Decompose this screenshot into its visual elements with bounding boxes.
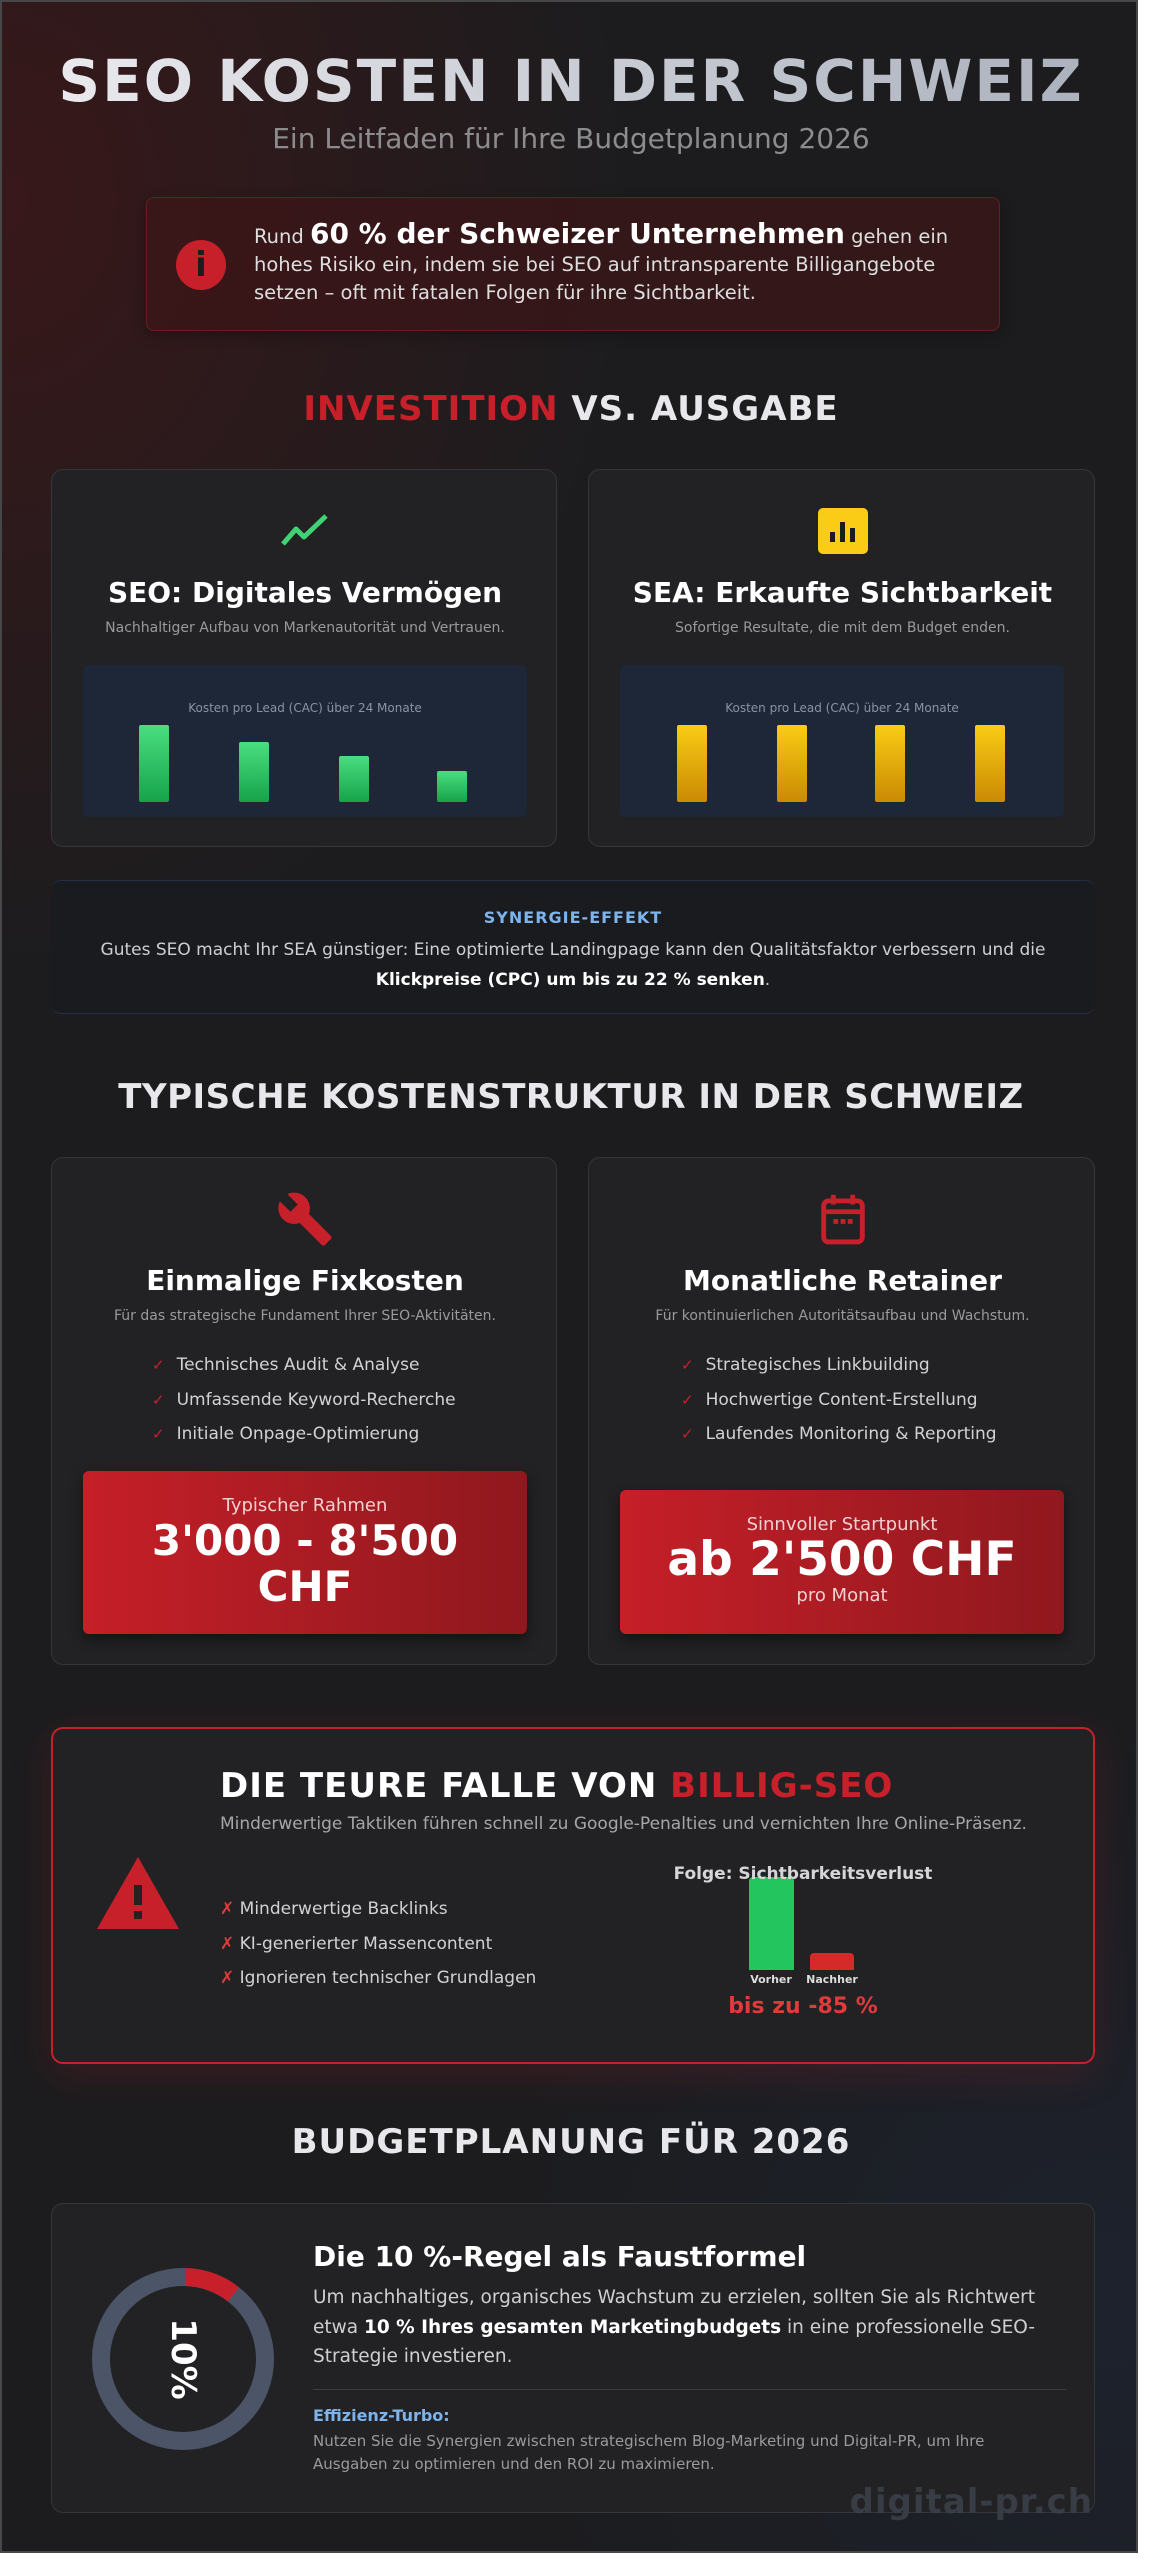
synergie text: Gutes SEO macht Ihr SEA günstiger: Eine optimierte Landingpage kann den Qualitätsfaktor verbessern und die Klickpreise (CPC) um bis zu 22 % senken. bbox=[101, 940, 1045, 990]
icon: info: i bbox=[195, 245, 207, 285]
chart: sichtbarkeitsverlust: bis zu -85 % bbox=[728, 1994, 878, 2019]
SEA subtitle: Sofortige Resultate, die mit dem Budget enden. bbox=[675, 620, 1010, 636]
icon: wrench bbox=[278, 1192, 332, 1246]
panel: synergie bbox=[51, 880, 1095, 1014]
list: retainer items bbox=[681, 1355, 997, 1444]
list: bad tactics: ✗ KI-generierter Massencontent bbox=[220, 1934, 492, 1954]
icon: info bbox=[176, 240, 226, 290]
chart: 10 percent donut bbox=[92, 2268, 274, 2450]
callout: 60 percent bbox=[146, 197, 1000, 331]
price: retainer: Sinnvoller Startpunkt bbox=[747, 1514, 937, 1535]
chart: sichtbarkeitsverlust: Vorher bbox=[750, 1973, 792, 1986]
synergie title: SYNERGIE-EFFEKT bbox=[484, 908, 662, 927]
panel: budget bbox=[51, 2203, 1095, 2513]
list: fixkosten items: ✓ Umfassende Keyword-Recherche bbox=[152, 1390, 456, 1410]
SEO title: SEO: Digitales Vermögen bbox=[108, 576, 502, 609]
price: retainer: pro Monat bbox=[796, 1585, 888, 1606]
list: fixkosten items bbox=[152, 1355, 456, 1444]
retainer subtitle: Für kontinuierlichen Autoritätsaufbau und Wachstum. bbox=[655, 1308, 1030, 1324]
SEO subtitle: Nachhaltiger Aufbau von Markenautorität und Vertrauen. bbox=[105, 620, 505, 636]
fixkosten subtitle: Für das strategische Fundament Ihrer SEO-Aktivitäten. bbox=[114, 1308, 496, 1324]
fixkosten title: Einmalige Fixkosten bbox=[146, 1264, 464, 1297]
icon: trend bbox=[281, 514, 328, 546]
list: retainer items: ✓ Hochwertige Content-Erstellung bbox=[681, 1390, 978, 1410]
price: fixkosten: 3'000 - 8'500 bbox=[152, 1516, 458, 1565]
price: fixkosten bbox=[83, 1471, 527, 1634]
heading: investition vs ausgabe: INVESTITION VS. AUSGABE bbox=[303, 389, 839, 429]
list: retainer items: ✓ Strategisches Linkbuilding bbox=[681, 1355, 930, 1375]
billig title: DIE TEURE FALLE VON BILLIG-SEO bbox=[220, 1766, 893, 1806]
panel: retainer bbox=[588, 1157, 1095, 1665]
chart: SEA CAC bbox=[620, 665, 1064, 817]
watermark: digital-pr.ch bbox=[850, 2482, 1093, 2522]
price: retainer: ab 2'500 CHF bbox=[667, 1532, 1017, 1587]
callout text: Rund 60 % der Schweizer Unternehmen gehen ein hohes Risiko ein, indem sie bei SEO auf intransparente Billigangebote setzen – oft mit fatalen Folgen für ihre Sichtbarkeit. bbox=[254, 217, 948, 304]
budget title: Die 10 %-Regel als Faustformel bbox=[313, 2240, 806, 2273]
chart: sichtbarkeitsverlust: Folge: Sichtbarkeitsverlust bbox=[674, 1864, 932, 1884]
chart: SEA CAC: Kosten pro Lead (CAC) über 24 Monate bbox=[725, 701, 959, 715]
heading: kostenstruktur: TYPISCHE KOSTENSTRUKTUR IN DER SCHWEIZ bbox=[118, 1077, 1024, 1117]
list: bad tactics: ✗ Minderwertige Backlinks bbox=[220, 1899, 448, 1919]
list: bad tactics: ✗ Ignorieren technischer Grundlagen bbox=[220, 1968, 536, 1988]
price: fixkosten: CHF bbox=[258, 1562, 352, 1611]
retainer title: Monatliche Retainer bbox=[683, 1264, 1002, 1297]
chart: SEO CAC bbox=[83, 665, 527, 817]
icon: calendar bbox=[821, 1194, 865, 1244]
chart: sichtbarkeitsverlust bbox=[674, 1864, 932, 2019]
title: SEO KOSTEN IN DER SCHWEIZ bbox=[58, 47, 1084, 115]
list: fixkosten items: ✓ Initiale Onpage-Optimierung bbox=[152, 1424, 419, 1444]
list: retainer items: ✓ Laufendes Monitoring & Reporting bbox=[681, 1424, 997, 1444]
chart: 10 percent donut: 10% bbox=[163, 2318, 203, 2400]
panel: fixkosten bbox=[51, 1157, 557, 1665]
billig subtitle: Minderwertige Taktiken führen schnell zu Google-Penalties und vernichten Ihre Online-Präsenz. bbox=[220, 1814, 1027, 1834]
budget text: Um nachhaltiges, organisches Wachstum zu erzielen, sollten Sie als Richtwert etwa 10 % Ihres gesamten Marketingbudgets in eine professionelle SEO-Strategie investieren. bbox=[313, 2287, 1035, 2367]
subtitle: Ein Leitfaden für Ihre Budgetplanung 2026 bbox=[272, 122, 870, 155]
list: fixkosten items: ✓ Technisches Audit & Analyse bbox=[152, 1355, 419, 1375]
chart: sichtbarkeitsverlust: Nachher bbox=[806, 1973, 858, 1986]
effizienz text: Nutzen Sie die Synergien zwischen strategischem Blog-Marketing und Digital-PR, um Ihre Ausgaben zu optimieren und den ROI zu maximieren. bbox=[313, 2432, 984, 2473]
price: retainer bbox=[620, 1490, 1064, 1634]
chart: SEO CAC: Kosten pro Lead (CAC) über 24 Monate bbox=[188, 701, 422, 715]
heading: budgetplanung: BUDGETPLANUNG FÜR 2026 bbox=[292, 2122, 850, 2162]
icon: bar chart bbox=[818, 508, 868, 554]
panel: billig-seo bbox=[51, 1727, 1095, 2064]
effizienz title: Effizienz-Turbo: bbox=[313, 2406, 450, 2425]
panel: SEA bbox=[588, 469, 1095, 847]
SEA title: SEA: Erkaufte Sichtbarkeit bbox=[633, 576, 1052, 609]
list: bad tactics bbox=[220, 1899, 536, 1988]
panel: SEO bbox=[51, 469, 557, 847]
price: fixkosten: Typischer Rahmen bbox=[223, 1495, 387, 1516]
icon: warning bbox=[97, 1857, 179, 1929]
